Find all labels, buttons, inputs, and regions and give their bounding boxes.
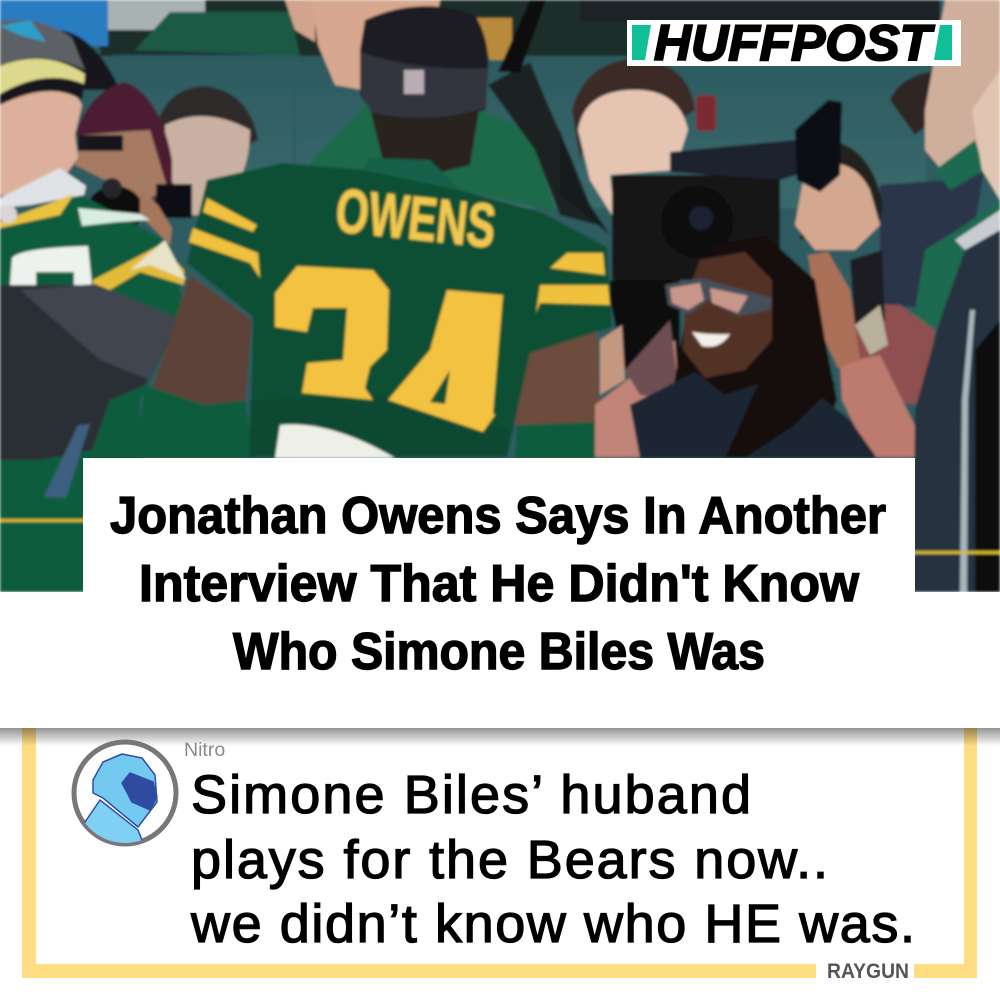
avatar: astronaut helmet: [74, 742, 176, 848]
shadow under headline card: [0, 728, 1000, 746]
cameraman face: [560, 58, 695, 235]
yellow frame around comment: [22, 728, 977, 978]
headline card: [0, 458, 1000, 728]
Simone Biles hair: [674, 236, 838, 408]
player jersey: [187, 158, 612, 458]
left man with beanie: [0, 20, 186, 592]
Simone Biles navy jacket: [630, 372, 877, 458]
film camera rig: [610, 95, 842, 370]
woman face in seats: [155, 86, 258, 215]
comment text: plays for the Bears now..: [191, 830, 828, 890]
headline: Jonathan Owens Says In Another: [110, 487, 886, 545]
Simone Biles face: [683, 252, 772, 378]
headline: Who Simone Biles Was: [233, 623, 765, 681]
comment text: [190, 765, 915, 954]
commenter name: Nitro: [184, 739, 225, 761]
stadium seats background: [0, 0, 1000, 592]
maroon hat photographer: [75, 82, 192, 245]
man behind player: [285, 0, 598, 225]
Simone Biles sleeve and hand: [595, 252, 917, 457]
braids over jacket: [726, 378, 835, 458]
comment text: we didn’t know who HE was.: [190, 894, 915, 954]
comment text: Simone Biles’ huband: [191, 765, 751, 825]
HuffPost logo: HUFFPOST: [654, 15, 936, 71]
yellow sideline rope: [0, 519, 1000, 554]
jersey number 34: [275, 266, 503, 432]
people right side: [880, 0, 1000, 330]
photo: crowd and player on the sideline: [0, 0, 1000, 592]
Raygun credit: RAYGUN: [827, 960, 909, 983]
Simone Biles smile: [692, 332, 730, 347]
lower comment panel background: [0, 728, 1000, 1000]
jersey name OWENS: OWENS: [333, 176, 499, 262]
left man dark jacket arm: [0, 284, 180, 498]
Simone Biles sunglasses: [665, 278, 772, 316]
woman looking up behind camera: [795, 140, 935, 405]
right person dark jacket: [913, 210, 1000, 592]
player bare arms and sleeves: [135, 275, 600, 458]
headline: [110, 487, 886, 681]
headline: Interview That He Didn't Know: [139, 555, 860, 613]
player head with black cap: [360, 6, 488, 175]
